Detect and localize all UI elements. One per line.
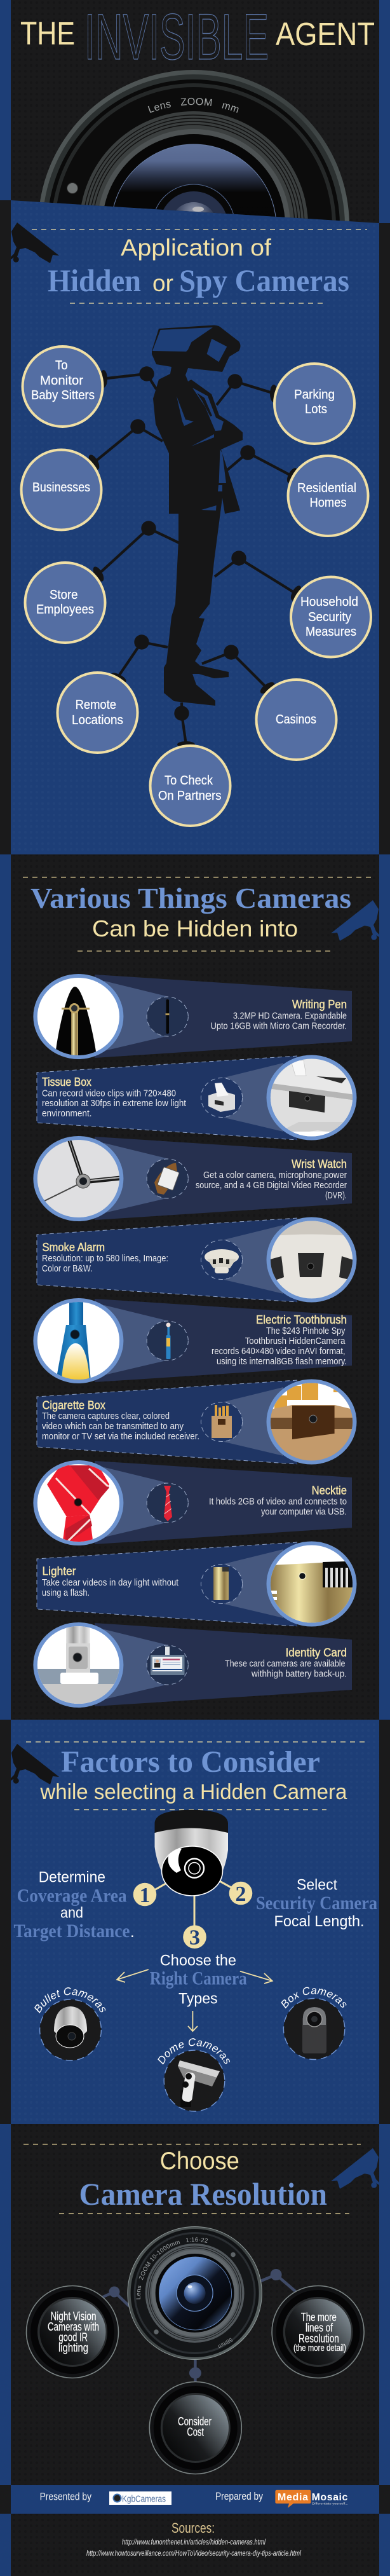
- text: necktie: Necktie: [312, 1484, 347, 1497]
- text: focal length: Security Camera: [256, 1893, 377, 1914]
- text: identity card: withhigh battery back-up.: [251, 1669, 347, 1680]
- box cameras: [281, 1987, 347, 2060]
- heading: various things cameras can be hidden into: Various Things Cameras: [30, 882, 351, 914]
- text: identity card: Identity Card: [286, 1647, 347, 1659]
- heading: application of hidden or spy cameras: or: [152, 270, 173, 296]
- text: writing pen: Upto 16GB with Micro Cam Recorder.: [211, 1021, 347, 1031]
- connector lines and numbers: [133, 1881, 252, 1950]
- logo: media mosaic: Media: [278, 2492, 308, 2503]
- circle: to monitor baby sitters: To: [55, 359, 67, 373]
- text: electric toothbrush: Toothbrush HiddenCamera: [245, 1336, 346, 1346]
- heading: application of hidden or spy cameras: Hidden: [48, 263, 141, 298]
- heading: choose camera resolution: Camera Resolution: [79, 2176, 327, 2212]
- text: identity card: These card cameras are available: [225, 1659, 346, 1669]
- text: tissue box: environment.: [42, 1109, 91, 1119]
- circle: to monitor baby sitters: Monitor: [40, 374, 83, 388]
- text: necktie: It holds 2GB of video and connects to: [209, 1497, 347, 1507]
- arrows: [117, 1970, 272, 2031]
- text: focal length: [256, 1877, 377, 1930]
- small lens: consider cost: Consider: [178, 2415, 212, 2428]
- circle: residential homes: Residential: [297, 481, 356, 495]
- title: INVISIBLE: [84, 1, 269, 73]
- text: right camera types: [150, 1952, 247, 2008]
- connector lines and numbers: 1: [140, 1884, 150, 1907]
- text: wrist watch: Get a color camera, microphone,power: [203, 1170, 347, 1181]
- circle: residential homes: [288, 456, 368, 536]
- text: lighter: [42, 1565, 178, 1598]
- section: things cameras can be hidden into: [0, 854, 390, 1720]
- text: cigarette box: video which can be transmitted to any: [42, 1422, 184, 1432]
- icon: security camera: [11, 1744, 59, 1785]
- text: electric toothbrush: records 640×480 video inAVI format,: [212, 1346, 346, 1357]
- section: header: [0, 0, 390, 223]
- text: lighter: Lighter: [42, 1565, 76, 1578]
- footer band: credits: Prepared by: [215, 2490, 263, 2502]
- text: lighter: using a flash.: [42, 1588, 90, 1598]
- circle: to check on partners: To Check: [165, 774, 213, 788]
- camera lens hero: Lens ZOOM mm: [147, 98, 239, 113]
- circle: businesses: Businesses: [32, 481, 90, 495]
- circle: parking lots: Parking: [294, 388, 335, 402]
- text: electric toothbrush: The $243 Pinhole Spy: [266, 1326, 346, 1336]
- camera lens hero: [40, 70, 349, 221]
- dome cameras: Dome Cameras: [158, 2038, 230, 2065]
- text: wrist watch: (DVR).: [325, 1191, 347, 1201]
- logo: kgb cameras: KgbCameras: [122, 2493, 166, 2505]
- text: right camera types: Right Camera: [150, 1968, 247, 1989]
- bullet cameras: Bullet Cameras: [34, 1987, 105, 2013]
- text: cigarette box: Cigarette Box: [42, 1399, 105, 1412]
- text: cigarette box: The camera captures clear, colored: [42, 1411, 170, 1422]
- circle: household security measures: Household: [300, 595, 358, 609]
- section: sources: [0, 2514, 390, 2576]
- circle: store employees: Employees: [36, 603, 94, 617]
- small lens: lines of resolution: lines of: [306, 2322, 333, 2334]
- section: sources: Sources:: [171, 2520, 215, 2536]
- text: right camera types: Choose the: [160, 1952, 236, 1970]
- circle: casinos: Casinos: [276, 713, 316, 727]
- item: tissue box: [37, 1055, 357, 1141]
- text: coverage area: Coverage Area: [17, 1886, 127, 1907]
- circle: remote locations: Locations: [72, 713, 123, 727]
- text: coverage area: .: [130, 1924, 135, 1941]
- text: focal length: Select: [297, 1877, 337, 1894]
- footer band: credits: [0, 2485, 390, 2514]
- section: sources: http://www.funonthenet.in/articles/hidden-cameras.html: [122, 2538, 266, 2547]
- text: necktie: your computer via USB.: [261, 1507, 347, 1518]
- section: factors to consider: [11, 1720, 379, 2124]
- logo: kgb cameras: [109, 2491, 171, 2505]
- text: lighter: Take clear videos in day light without: [42, 1578, 178, 1588]
- text: tissue box: Can record video clips with 720×480: [42, 1088, 176, 1099]
- small lens: lines of resolution: The more: [301, 2311, 337, 2324]
- heading: application of hidden or spy cameras: Spy Cameras: [179, 263, 349, 298]
- text: wrist watch: [196, 1158, 347, 1201]
- icon: dome camera: [155, 1810, 228, 1896]
- text: writing pen: Writing Pen: [292, 998, 347, 1011]
- text: smoke alarm: Smoke Alarm: [42, 1241, 105, 1254]
- heading: application of hidden or spy cameras: Application of: [121, 235, 272, 261]
- item: necktie: [32, 1459, 352, 1548]
- item: wrist watch: [32, 1135, 352, 1224]
- text: cigarette box: monitor or TV set via the included receiver.: [42, 1432, 199, 1442]
- circle: to monitor baby sitters: [23, 346, 103, 427]
- silhouette: man with camera head: [152, 325, 243, 706]
- text: writing pen: [211, 998, 347, 1031]
- circle: store employees: Store: [50, 588, 77, 602]
- footer band: credits: Presented by: [40, 2491, 91, 2503]
- small lens: consider cost: [149, 2381, 241, 2474]
- box cameras: Box Cameras: [281, 1987, 347, 2009]
- text: right camera types: Types: [178, 1990, 218, 2008]
- heading: application of hidden or spy cameras: [48, 235, 349, 298]
- text: electric toothbrush: Electric Toothbrush: [256, 1313, 347, 1326]
- small lens: lines of resolution: [272, 2286, 364, 2378]
- circle: remote locations: [57, 673, 137, 753]
- section: applications: [0, 200, 390, 855]
- heading: choose camera resolution: Choose: [160, 2148, 239, 2175]
- small lens: consider cost: Cost: [187, 2426, 204, 2439]
- icon: security camera: [331, 900, 379, 941]
- logo: media mosaic: Differentiate yourself...: [312, 2502, 348, 2505]
- circle: parking lots: Lots: [305, 402, 327, 416]
- small lens: night vision: Cameras with: [48, 2320, 99, 2333]
- circle: store employees: [25, 563, 105, 643]
- item: smoke alarm: [37, 1217, 357, 1303]
- text: necktie: [209, 1484, 347, 1518]
- circle: household security measures: Measures: [306, 625, 356, 639]
- logo: media mosaic: [275, 2490, 348, 2508]
- circle: to check on partners: [150, 746, 230, 826]
- connectors: [102, 2269, 296, 2383]
- circle: remote locations: Remote: [76, 698, 116, 712]
- item: electric toothbrush: [32, 1297, 352, 1386]
- main lens: 58mm: [217, 2336, 234, 2350]
- small lens: night vision: [27, 2286, 118, 2378]
- text: wrist watch: Wrist Watch: [292, 1158, 347, 1170]
- dome cameras: [158, 2038, 230, 2112]
- text: tissue box: [42, 1076, 186, 1119]
- text: coverage area: Determine: [39, 1869, 105, 1886]
- connector lines: [86, 366, 303, 748]
- heading: various things cameras can be hidden into: [30, 882, 351, 942]
- circle: household security measures: Security: [308, 610, 351, 624]
- small lens: lines of resolution: Resolution: [299, 2332, 339, 2345]
- small lens: night vision: good IR: [58, 2331, 88, 2344]
- text: wrist watch: source, and a 4 GB Digital Video Recorder: [196, 1181, 347, 1191]
- item: cigarette box: [37, 1380, 357, 1465]
- text: focal length: Focal Length.: [274, 1913, 365, 1930]
- text: coverage area: [14, 1869, 135, 1942]
- text: tissue box: Tissue Box: [42, 1076, 91, 1088]
- title: AGENT: [276, 16, 375, 52]
- item: writing pen: [32, 973, 352, 1062]
- text: coverage area: and: [60, 1905, 83, 1922]
- text: smoke alarm: [42, 1241, 168, 1274]
- circle: casinos: [257, 680, 337, 760]
- heading: factors to consider: Factors to Consider: [61, 1745, 320, 1779]
- heading: factors to consider: [39, 1745, 347, 1804]
- text: cigarette box: [42, 1399, 199, 1442]
- title: THE: [20, 15, 75, 51]
- icon: security camera: [11, 223, 59, 263]
- circle: parking lots: [274, 364, 354, 444]
- heading: choose camera resolution: [79, 2148, 327, 2212]
- section: choose camera resolution: [0, 2124, 390, 2485]
- small lens: night vision: lighting: [58, 2341, 88, 2354]
- connector lines and numbers: 3: [189, 1926, 200, 1950]
- text: electric toothbrush: using its internal8GB flash memory.: [217, 1357, 347, 1367]
- text: smoke alarm: Color or B&W.: [42, 1264, 93, 1274]
- circle: to monitor baby sitters: Baby Sitters: [31, 388, 95, 402]
- text: writing pen: 3.2MP HD Camera. Expandable: [233, 1011, 347, 1022]
- small lens: lines of resolution: (the more detail): [293, 2343, 346, 2353]
- section: sources: http://www.howtosurveillance.com/HowToVideo/security-camera-diy-tips-article.html: [86, 2549, 301, 2558]
- heading: factors to consider: while selecting a Hidden Camera: [39, 1780, 347, 1804]
- text: coverage area: Target Distance: [14, 1921, 130, 1942]
- small lens: night vision: Night Vision: [51, 2310, 97, 2322]
- circle: household security measures: [291, 577, 371, 657]
- text: tissue box: resolution at 30fps in extreme low light: [42, 1099, 186, 1109]
- icon: security camera: [331, 2148, 379, 2189]
- connector lines and numbers: 2: [235, 1882, 246, 1906]
- item: identity card: [32, 1621, 352, 1710]
- circle: businesses: [22, 450, 102, 530]
- text: electric toothbrush: [212, 1313, 347, 1367]
- bullet cameras: [34, 1987, 105, 2061]
- text: smoke alarm: Resolution: up to 580 lines, Image:: [42, 1254, 168, 1264]
- main lens: [127, 2226, 262, 2360]
- text: identity card: [225, 1647, 347, 1680]
- logo: media mosaic: Mosaic: [312, 2492, 347, 2503]
- main lens: Lens ZOOM 10-1000mm 1:16-22: [136, 2237, 208, 2299]
- heading: various things cameras can be hidden into: Can be Hidden into: [92, 915, 298, 942]
- circle: residential homes: Homes: [310, 496, 347, 510]
- circle: to check on partners: On Partners: [158, 789, 221, 803]
- item: lighter: [37, 1541, 357, 1627]
